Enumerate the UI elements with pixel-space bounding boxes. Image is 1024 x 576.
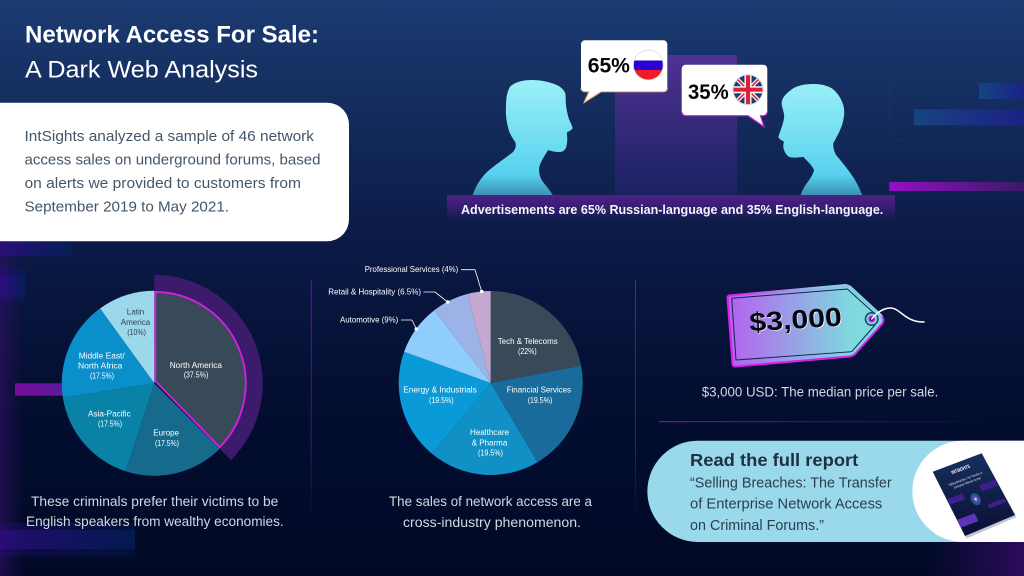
speech bubble: English bbox=[682, 65, 767, 127]
caption: regions bbox=[26, 494, 284, 529]
panel: read the full report bbox=[647, 441, 1024, 542]
decorative bar: beside left pie bbox=[15, 383, 63, 396]
slice: Middle East / North Africa bbox=[62, 308, 154, 398]
report heading: Read the full report bbox=[690, 450, 858, 470]
left purple glow bbox=[0, 241, 24, 576]
icon: price tag: $3,000 bbox=[749, 302, 843, 338]
icon: price tag bbox=[728, 285, 924, 366]
caption: industries bbox=[389, 494, 592, 530]
panel: industries pie chart bbox=[328, 264, 583, 475]
highlight arc bbox=[154, 275, 263, 460]
title: Network Access For Sale: bbox=[25, 22, 319, 49]
slice: Latin America bbox=[100, 291, 154, 383]
bottom-right purple glow bbox=[930, 540, 1024, 576]
pie labels: Energy & Industrials bbox=[403, 385, 477, 395]
icon: right silhouette bbox=[778, 84, 862, 195]
pill background bbox=[647, 441, 1024, 542]
pie labels bbox=[78, 306, 222, 448]
speech bubble: English: 35% bbox=[688, 80, 729, 104]
report title: “Selling Breaches: The Transfer bbox=[690, 475, 892, 492]
icon: left silhouette bbox=[473, 80, 573, 195]
intro paragraph bbox=[24, 128, 321, 215]
report title: on Criminal Forums.” bbox=[690, 517, 824, 534]
report title bbox=[690, 475, 892, 534]
pie labels: Asia-Pacific bbox=[88, 408, 131, 418]
pie labels: Latin bbox=[127, 306, 145, 316]
pie labels: Automotive (9%) bbox=[340, 315, 398, 325]
slice: Asia-Pacific bbox=[63, 383, 154, 471]
slice: Tech & Telecoms bbox=[491, 291, 581, 383]
icon: price tag: $3,000 bbox=[748, 302, 843, 337]
title bbox=[25, 22, 319, 84]
pie labels: Retail & Hospitality (6.5%) bbox=[328, 287, 421, 297]
pie labels: America bbox=[121, 317, 150, 327]
decorative blocks: top right bbox=[890, 67, 1024, 141]
icon: report cover: INTSIGHTS bbox=[950, 463, 971, 475]
purple caption band bbox=[447, 195, 895, 220]
icon: report cover bbox=[933, 453, 1016, 538]
pie labels: Tech & Telecoms bbox=[498, 336, 558, 346]
pie labels: (17.5%) bbox=[90, 371, 114, 381]
slice: North America bbox=[155, 292, 246, 447]
icon: report cover: Selling Breaches: The Transfer of bbox=[948, 471, 983, 487]
panel: median price bbox=[702, 285, 938, 400]
median price caption: $3,000 USD: The median price per sale. bbox=[702, 385, 938, 400]
slice: Automotive bbox=[404, 310, 491, 383]
icon: UK flag bbox=[733, 75, 763, 105]
pie labels: (19.5%) bbox=[478, 447, 503, 457]
pie labels: North Africa bbox=[78, 360, 123, 370]
caption: regions: English speakers from wealthy economies. bbox=[26, 514, 284, 529]
panel: advertisement languages bbox=[447, 40, 895, 220]
leader lines bbox=[401, 270, 482, 329]
pie labels: (17.5%) bbox=[155, 438, 179, 448]
icon: report cover: Enterprise Network Access bbox=[953, 475, 982, 490]
divider left bbox=[311, 280, 312, 520]
decorative block: bottom left bbox=[0, 523, 135, 557]
slice: Financial Services bbox=[491, 366, 583, 462]
divider horizontal bbox=[659, 421, 1004, 422]
leader dots bbox=[414, 290, 484, 331]
pie labels: Healthcare bbox=[470, 427, 509, 437]
pie labels: (10%) bbox=[127, 327, 146, 337]
intro paragraph: September 2019 to May 2021. bbox=[24, 198, 229, 215]
pie labels: (22%) bbox=[518, 346, 537, 356]
pie labels: North America bbox=[170, 360, 222, 370]
intro paragraph: on alerts we provided to customers from bbox=[24, 175, 301, 192]
intro paragraph: IntSights analyzed a sample of 46 network bbox=[24, 128, 314, 145]
pie labels: & Pharma bbox=[472, 437, 507, 447]
caption: industries: cross-industry phenomenon. bbox=[403, 515, 581, 530]
pie labels: Europe bbox=[153, 428, 179, 438]
pie labels: (19.5%) bbox=[429, 395, 454, 405]
speech bubble: Russian: 65% bbox=[588, 54, 630, 78]
pie labels: (37.5%) bbox=[184, 370, 208, 380]
decorative block: top left bbox=[0, 241, 72, 256]
speech bubble: Russian bbox=[581, 40, 667, 102]
pie labels: Professional Services (4%) bbox=[365, 264, 458, 274]
slice: Healthcare & Pharma bbox=[432, 383, 538, 475]
decorative block: left middle bbox=[0, 268, 26, 301]
icon: Russian flag bbox=[633, 50, 664, 81]
slice: Europe bbox=[126, 383, 220, 476]
advertisement caption: Advertisements are 65% Russian-language and 35% English-language. bbox=[461, 203, 883, 217]
panel: regions pie chart bbox=[62, 275, 263, 476]
decorative bar: right bbox=[889, 182, 1024, 191]
pie labels: (19.5%) bbox=[528, 395, 552, 405]
panel: intro text bbox=[0, 103, 349, 241]
slice: Retail & Hospitality bbox=[434, 294, 491, 383]
intro paragraph: access sales on underground forums, based bbox=[24, 151, 321, 168]
slice: Professional Services bbox=[468, 291, 491, 383]
slice: Energy & Industrials bbox=[399, 352, 491, 454]
caption: industries: The sales of network access are a bbox=[389, 494, 592, 509]
pie labels: Financial Services bbox=[507, 385, 571, 395]
report title: of Enterprise Network Access bbox=[690, 496, 882, 513]
purple backdrop bbox=[615, 55, 737, 195]
divider right bbox=[635, 280, 636, 520]
pie labels bbox=[328, 264, 571, 457]
pie labels: (17.5%) bbox=[98, 419, 122, 429]
title: A Dark Web Analysis bbox=[25, 57, 258, 84]
caption: regions: These criminals prefer their victims to be bbox=[31, 494, 278, 509]
pie labels: Middle East/ bbox=[79, 350, 125, 360]
white section bbox=[912, 441, 1024, 542]
